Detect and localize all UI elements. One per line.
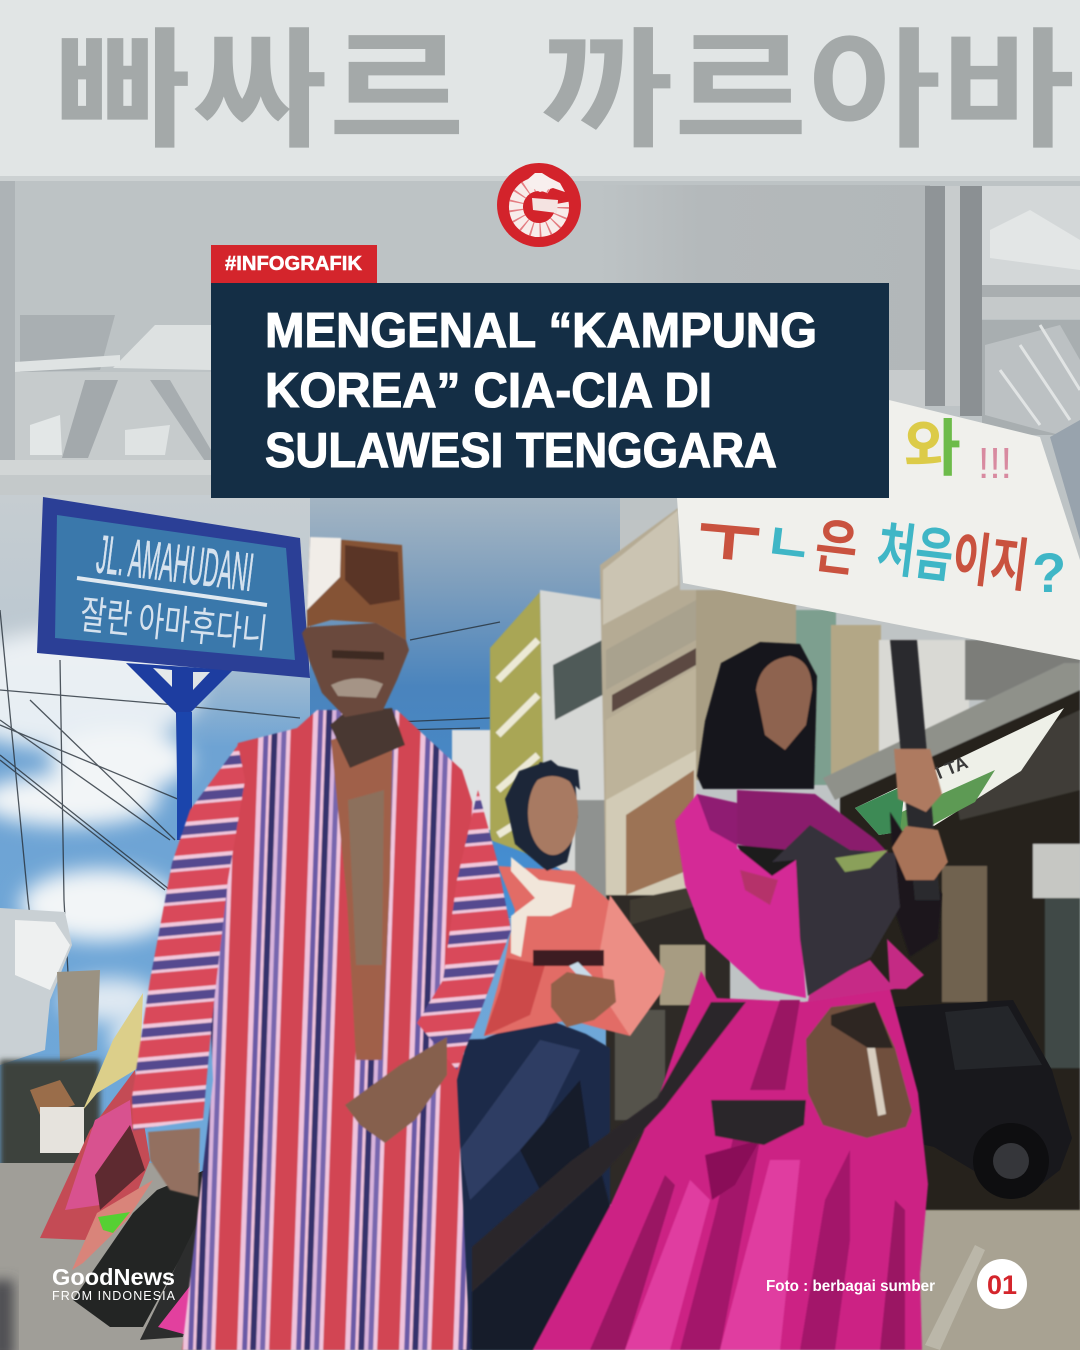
- title text: KOREA” CIA-CIA DI: [265, 364, 712, 418]
- pink sleeve: [675, 794, 806, 998]
- placard pole: [890, 640, 940, 900]
- black sash: [472, 1002, 746, 1292]
- page number badge: [977, 1259, 1027, 1309]
- awning banner: MI TA: [919, 752, 971, 789]
- white protest placard: ㄴ: [760, 497, 819, 582]
- title text: [265, 304, 817, 478]
- head: [302, 623, 409, 717]
- woman in magenta hanbok with placard pole: [472, 640, 948, 1350]
- right sleeve: [417, 790, 511, 1070]
- woven bag: [806, 1002, 912, 1138]
- waist patch: [711, 1100, 806, 1145]
- photo credit: Foto : berbagai sumber: [766, 1278, 935, 1295]
- magenta skirt: [533, 971, 928, 1350]
- road right: [905, 1200, 1080, 1350]
- white protest placard: ㅜ: [693, 480, 766, 587]
- white protest placard: [677, 398, 1080, 660]
- dark brocade sleeve: [772, 825, 900, 996]
- white protest placard: !!!: [978, 439, 1012, 488]
- black sleeve underside: [890, 812, 942, 957]
- hands on pole: [894, 749, 942, 812]
- upper dress: [737, 790, 895, 870]
- sky with clouds: [0, 495, 620, 1195]
- logo badge: [497, 163, 581, 247]
- robe body: [182, 710, 497, 1350]
- old man in striped robe: [132, 537, 511, 1350]
- left sleeve: [132, 745, 245, 1130]
- left distant buildings and road: [0, 908, 200, 1350]
- banner hangul lettering: [55, 0, 1075, 174]
- navy skirt: [450, 1016, 610, 1350]
- headscarf: [505, 760, 578, 871]
- hands: [345, 1037, 447, 1143]
- black headscarf: [697, 642, 817, 789]
- GoodNews wordmark: GoodNews: [52, 1264, 175, 1290]
- hashtag label: #INFOGRAFIK: [225, 253, 363, 275]
- street sign: JL. Amahudani: 잘란 아마후다니: [78, 582, 271, 660]
- dark area below sash: [472, 1175, 610, 1350]
- GoodNews wordmark: [52, 1264, 176, 1303]
- batik shirt: [331, 720, 393, 1060]
- page number badge: 01: [987, 1270, 1017, 1300]
- background: grey market gate photo: [0, 0, 1080, 540]
- hashtag label: [211, 245, 377, 283]
- title panel: [211, 283, 889, 498]
- street buildings: [452, 508, 1080, 1210]
- white protest placard: 와: [904, 398, 961, 488]
- white sash: [511, 857, 575, 957]
- face: [756, 656, 812, 750]
- GoodNews wordmark: FROM INDONESIA: [52, 1289, 176, 1303]
- title text: MENGENAL “KAMPUNG: [265, 304, 817, 358]
- songkok hat: [307, 537, 406, 640]
- white protest placard: 은: [811, 498, 863, 589]
- bottle and hands: [569, 962, 600, 993]
- woman in salmon hanbok: [450, 760, 665, 1350]
- salmon jacket: [484, 866, 665, 1036]
- face: [528, 771, 578, 855]
- awning banner: [855, 708, 1064, 835]
- title text: SULAWESI TENGGARA: [265, 424, 777, 478]
- street sign: JL. Amahudani: JL. AMAHUDANI: [94, 524, 257, 603]
- white protest placard: ?: [1032, 541, 1066, 604]
- crowd at far left: [40, 993, 205, 1340]
- skirt folds: [590, 1175, 675, 1350]
- white protest placard: 처음이지: [873, 501, 1034, 603]
- street sign: JL. Amahudani: [37, 497, 310, 840]
- overhead wires: [0, 610, 500, 1040]
- van: [893, 1000, 1072, 1199]
